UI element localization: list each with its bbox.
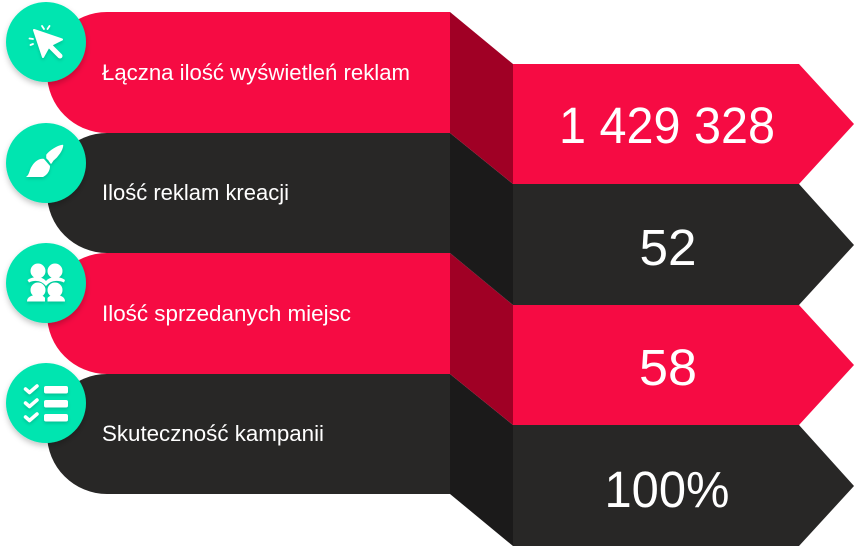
panel: row 4 label bar [47, 374, 450, 494]
panel: row 1 label bar [47, 12, 450, 133]
value: row 3: 58 [639, 339, 697, 396]
fold: row 1 [450, 12, 513, 184]
fold: row 3 [450, 253, 513, 425]
fold: row 2 [450, 133, 513, 305]
panel: row 4 value arrow [513, 425, 854, 546]
value: row 1: 1 429 328 [559, 97, 775, 154]
panel: row 2 value arrow [513, 184, 854, 305]
fold: row 4 [450, 374, 513, 546]
panel: row 2 label bar [47, 133, 450, 253]
icon: paintbrush badge [6, 123, 86, 203]
label: row 3: Ilość sprzedanych miejsc [102, 301, 351, 326]
label: row 1: Łączna ilość wyświetleń reklam [102, 60, 410, 85]
panel: row 3 label bar [47, 253, 450, 374]
label: row 4: Skuteczność kampanii [102, 421, 324, 446]
icon: checklist badge [6, 363, 86, 443]
panel: row 1 value arrow [513, 64, 854, 184]
icon: people badge [6, 243, 86, 323]
panel: row 3 value arrow [513, 305, 854, 425]
icon: cursor badge [6, 2, 86, 82]
value: row 2: 52 [640, 219, 696, 276]
label: row 2: Ilość reklam kreacji [102, 180, 289, 205]
value: row 4: 100% [604, 461, 730, 518]
